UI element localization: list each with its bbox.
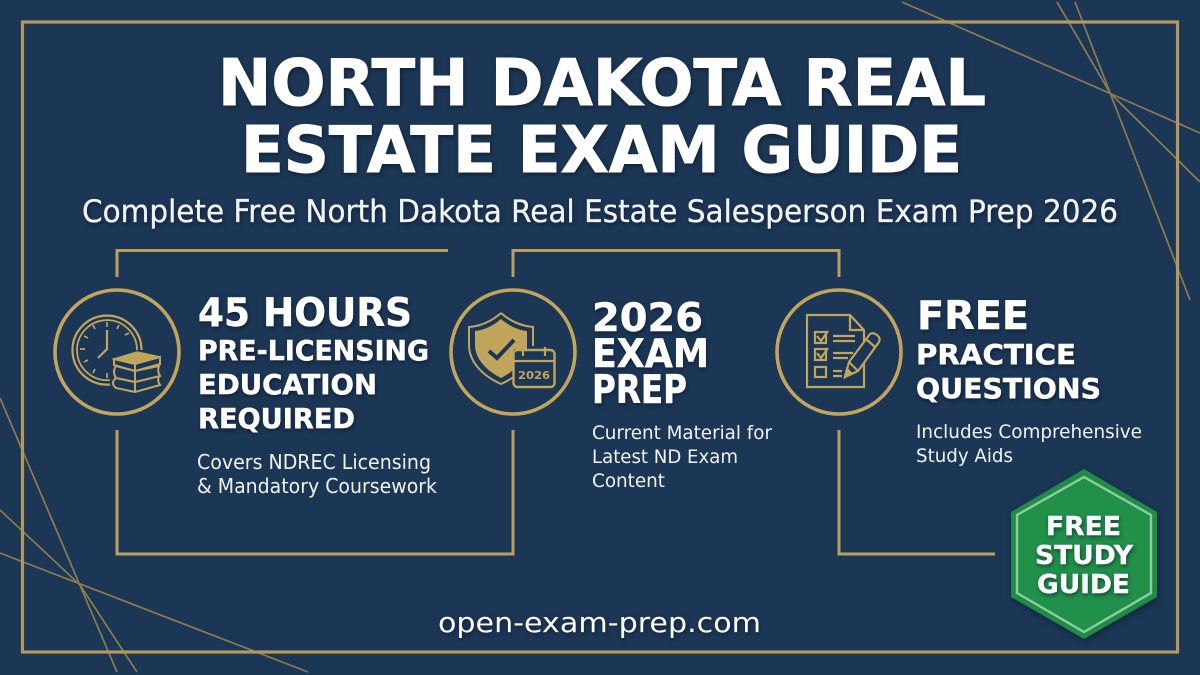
heading: 45 hours: 45 HOURS [198, 291, 412, 336]
heading: free practice questions: PRACTICE [916, 338, 1076, 371]
badge: free study guide: STUDY [1035, 541, 1134, 571]
text: coverage [197, 450, 437, 498]
heading: free practice questions: QUESTIONS [916, 372, 1101, 405]
text: current material: Current Material for [592, 422, 772, 444]
title [218, 47, 986, 188]
panel: connecting brackets [117, 250, 995, 554]
text: current material: Latest ND Exam [592, 446, 738, 468]
heading: 45 hours [198, 291, 429, 435]
heading: free practice questions: FREE [917, 294, 1029, 339]
text: coverage: & Mandatory Coursework [197, 474, 437, 498]
title: ESTATE EXAM GUIDE [241, 114, 962, 188]
heading: 45 hours: PRE-LICENSING [198, 334, 429, 367]
heading: free practice questions [916, 294, 1101, 405]
badge: free study guide [1011, 469, 1157, 639]
icon: clock and books [55, 290, 179, 414]
icon: shield and calendar [451, 290, 575, 414]
icon: checklist and pencil [777, 290, 901, 414]
website url: open-exam-prep.com [438, 606, 761, 639]
text: study aids: Includes Comprehensive [916, 421, 1142, 443]
heading: 45 hours: EDUCATION [198, 368, 377, 401]
panel: 2026 exam prep [451, 290, 772, 492]
title: NORTH DAKOTA REAL [218, 47, 986, 121]
heading: 2026 exam prep: EXAM [592, 332, 709, 377]
heading: 2026 exam prep [592, 296, 709, 413]
text: coverage: Covers NDREC Licensing [197, 450, 431, 474]
badge: free study guide: FREE [1046, 512, 1121, 542]
badge: free study guide: GUIDE [1037, 570, 1130, 600]
heading: 45 hours: REQUIRED [198, 402, 355, 435]
text: study aids: Study Aids [916, 445, 1013, 467]
panel: free practice questions [777, 290, 1142, 467]
subtitle: Complete Free North Dakota Real Estate Salesperson Exam Prep 2026 [82, 194, 1118, 230]
text: current material: Content [592, 470, 665, 492]
text: study aids [916, 421, 1142, 467]
heading: 2026 exam prep: PREP [592, 368, 687, 413]
heading: 2026 exam prep: 2026 [592, 296, 703, 341]
text: current material [592, 422, 772, 492]
icon: shield and calendar: 2026 [518, 369, 550, 382]
panel: 45 hours [55, 290, 437, 498]
